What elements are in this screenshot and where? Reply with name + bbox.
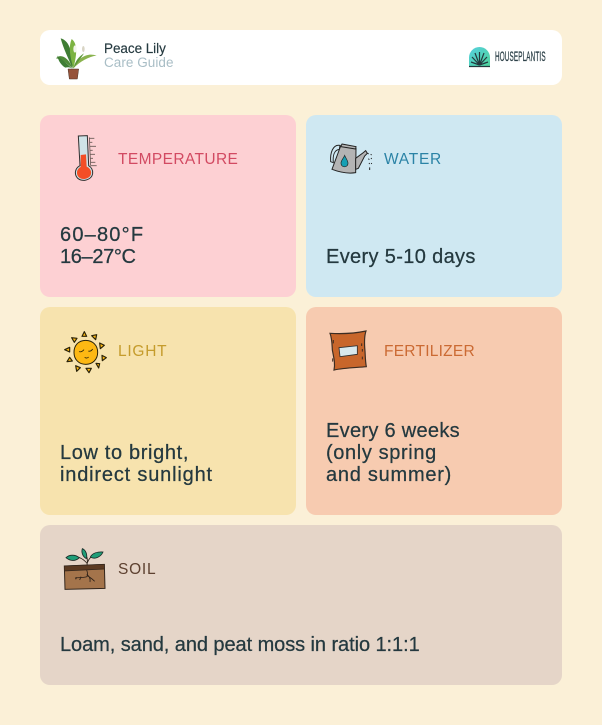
panel: fertilizer: [306, 307, 562, 515]
heading: water: WATER: [384, 150, 442, 168]
icon: smiling sun: [64, 331, 107, 374]
text: fertilizer schedule: and summer): [326, 464, 452, 486]
text: soil mix: Loam, sand, and peat moss in ratio 1:1:1: [60, 634, 420, 656]
text: fertilizer schedule: (only spring: [326, 442, 437, 464]
text: fertilizer schedule: [326, 420, 460, 486]
heading: soil: SOIL: [118, 560, 156, 578]
panel: temperature: [40, 115, 296, 297]
heading: light: LIGHT: [118, 342, 167, 360]
icon: thermometer: [74, 135, 97, 181]
text: light requirement: indirect sunlight: [60, 464, 213, 486]
heading: fertilizer: FERTILIZER: [384, 342, 475, 360]
panel: water: [306, 115, 562, 297]
subtitle: care guide: Care Guide: [104, 55, 174, 70]
header bar: [40, 30, 562, 85]
text: temperature range: 60–80°F: [60, 224, 144, 246]
panel: light: [40, 307, 296, 515]
icon: fertilizer bag: [329, 330, 367, 371]
text: water frequency: Every 5-10 days: [326, 246, 476, 268]
icon: seedling in soil: [64, 548, 106, 590]
text: light requirement: [60, 442, 213, 486]
logo: Houseplantis: [469, 47, 546, 68]
heading: temperature: TEMPERATURE: [118, 150, 238, 168]
icon: potted peace lily: [56, 38, 96, 80]
text: temperature range: 16–27°C: [60, 246, 136, 268]
text: temperature range: [60, 224, 144, 268]
title: plant name: Peace Lily: [104, 41, 166, 56]
panel: soil: [40, 525, 562, 685]
icon: watering can: [330, 144, 372, 174]
logo wordmark: HOUSEPLANTIS: [495, 49, 546, 64]
icon: logo mark: [469, 47, 490, 68]
text: light requirement: Low to bright,: [60, 442, 189, 464]
text: fertilizer schedule: Every 6 weeks: [326, 420, 460, 442]
